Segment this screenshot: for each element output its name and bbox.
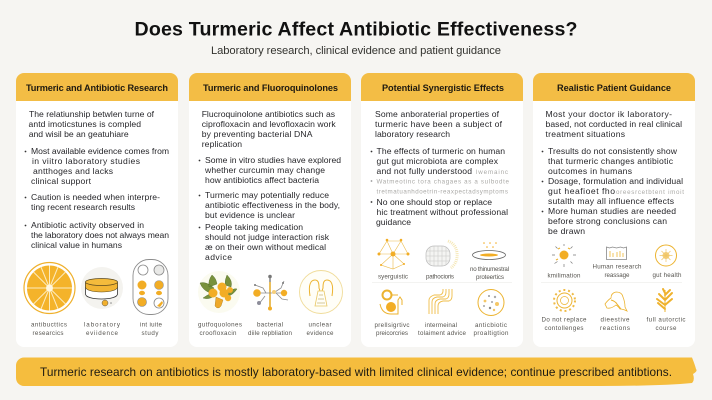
text block: fluoroquinolone notes: whether curcumin may change <box>204 165 325 175</box>
icon labels: croofloxacin <box>200 330 237 337</box>
title: Does Turmeric Affect Antibiotic Effectiveness? <box>134 18 578 40</box>
icon labels row two: Do not replace <box>542 316 587 324</box>
icon: antibiotic culture dish <box>478 290 504 316</box>
icon: prebiotic prescription <box>380 290 402 314</box>
icon labels row two: tolaiment advice <box>418 330 467 337</box>
icon labels row one: reassage <box>604 272 630 279</box>
icon: do not replace <box>554 290 575 311</box>
text block: research notes <box>25 109 169 250</box>
text block: fluoroquinolone notes: Turmeric may potentially reduce <box>205 190 329 200</box>
icon labels row two: course <box>656 325 677 332</box>
icon: intestinal tract <box>429 289 452 314</box>
icon labels: laboratory <box>84 322 121 328</box>
text block: research notes: the laboratory does not always mean <box>31 230 169 240</box>
panel header <box>361 73 523 101</box>
text block: fluoroquinolone notes: Flucroquinolone antibiotics such as <box>202 109 335 119</box>
text block: guidance notes: outcomes in humans <box>548 166 632 176</box>
icon: pathogen mesh <box>426 241 457 268</box>
text block: guidance notes: before strong conclusions can <box>548 216 667 226</box>
icon: bacterial DNA replication <box>253 275 288 310</box>
panel header: Potential Synergistic Effects <box>382 83 504 93</box>
icon labels row one <box>548 264 682 280</box>
panel: potential synergistic effects <box>361 73 523 347</box>
panel header: Realistic Patient Guidance <box>557 83 671 93</box>
text block: guidance notes: based, not corducted in real clinical <box>546 119 682 129</box>
text block: synergy notes <box>371 109 510 227</box>
icon: turmeric slice <box>24 262 75 314</box>
text block: synergy notes: Some anboraterial properties of <box>375 109 500 119</box>
icon labels: diile repbliation <box>248 330 293 337</box>
icon labels: study <box>142 330 159 337</box>
text block: research notes: Most available evidence comes from <box>31 146 169 156</box>
icon: in vitro well plate <box>133 260 168 314</box>
text block: guidance notes: Tresults do not consistently show <box>548 146 678 156</box>
text block: guidance notes: oreesrcetbtent imoit <box>616 189 684 196</box>
callout banner: Turmeric research on antibiotics is mostly laboratory-based with limited clinical evidence; continue prescribed antibtions. <box>40 365 672 379</box>
icon labels row one: pathocioris <box>426 274 454 280</box>
icon labels row one: Human research <box>592 264 642 270</box>
icon labels row two: preicorcries <box>376 330 408 337</box>
text block: research notes: ting recent research results <box>31 202 135 212</box>
icon labels: eviidence <box>86 330 119 337</box>
text block: research notes: Caution is needed when interpre- <box>31 192 160 202</box>
icon labels row two: dieestive <box>600 316 630 324</box>
icon labels: antibucttics <box>31 322 67 328</box>
text block: guidance notes: be drawn <box>548 226 585 236</box>
panel header <box>533 73 695 101</box>
icon labels row one <box>378 266 509 281</box>
icon: digestive reactions <box>605 292 627 311</box>
icon labels: gutfoquolones <box>198 322 242 328</box>
text block: synergy notes: tretmatuanhdoetrin-reaxpectadsymptoms <box>376 188 508 196</box>
icon: inflammation sun <box>552 244 576 267</box>
text block: guidance notes: gut heafioet fho <box>548 186 615 196</box>
text block: synergy notes: and not fully understood <box>376 166 472 176</box>
icon labels row two: proaltigtion <box>474 330 509 337</box>
icon labels row two: contollenges <box>544 325 584 332</box>
text block: guidance notes: Dosage, formulation and individual <box>548 176 683 186</box>
text block: fluoroquinolone notes: Some in vitro studies have explored <box>205 155 341 165</box>
icon labels: evidence <box>306 330 334 337</box>
icon labels row two: anticbiotic <box>475 322 507 329</box>
subtitle: Laboratory research, clinical evidence and patient guidance <box>211 45 501 57</box>
text block: fluoroquinolone notes: People taking medication <box>205 222 303 232</box>
icon labels row one: gut health <box>652 272 682 279</box>
callout banner <box>16 358 697 386</box>
icon: laboratory dish <box>81 267 123 309</box>
panel header <box>189 73 351 101</box>
text block: fluoroquinolone notes: ciprofloxacin and levofloxacin work <box>202 119 336 129</box>
text block: synergy notes: No one should stop or replace <box>376 197 492 207</box>
icon labels row two: reactions <box>600 325 630 332</box>
text block: research notes: clinical value in humans <box>31 240 122 250</box>
icon labels <box>31 322 163 337</box>
text block: research notes: clinical support <box>31 176 92 186</box>
panel header: Turmeric and Fluoroquinolones <box>203 83 338 93</box>
icon: human research message <box>606 247 626 260</box>
panel header: Turmeric and Antibiotic Research <box>26 83 168 93</box>
text block: guidance notes: treatment situations <box>546 129 625 139</box>
text block: synergy notes: The effects of turmeric on human <box>376 146 505 156</box>
icon labels row one: no thinumestral <box>470 266 509 273</box>
panel: turmeric and antibiotic research <box>16 73 178 347</box>
text block: fluoroquinolone notes: replication <box>202 139 242 149</box>
text block: fluoroquinolone notes: should not judge interaction risk <box>205 232 330 242</box>
text block: guidance notes <box>542 109 684 236</box>
icon: gut health <box>656 245 676 266</box>
icon labels row one: syerguistic <box>378 274 408 280</box>
text block: fluoroquinolone notes <box>199 109 341 262</box>
icon labels row one: proteertics <box>476 274 504 281</box>
text block: research notes: in viitro laboratory studies <box>32 156 140 166</box>
icon labels <box>198 322 334 337</box>
text block: synergy notes: gut gut microbiota are complex <box>376 156 499 166</box>
icon: turmeric root and leaves <box>198 271 240 313</box>
text block: research notes: antd imoticstunes is compled <box>28 119 141 129</box>
text block: fluoroquinolone notes: but evidence is unclear <box>205 210 295 220</box>
text block: fluoroquinolone notes: æ on their own without medical <box>205 242 326 252</box>
icon labels row two <box>374 322 509 337</box>
text block: synergy notes: Watmeotinc tora chagaes as a sulbodte <box>376 178 510 186</box>
text block: research notes: antthoges and lacks <box>33 166 113 176</box>
icon labels row one: kmilimation <box>548 272 581 280</box>
panel: realistic patient guidance <box>533 73 695 347</box>
text block: guidance notes: Most your doctor ik laboratory- <box>546 109 672 119</box>
icon labels: researcics <box>32 330 64 337</box>
text block: research notes: The relatiunship betwlen turne of <box>29 109 155 119</box>
icon labels: bacterial <box>257 322 283 328</box>
panel header <box>16 73 178 101</box>
text block: fluoroquinolone notes: advice <box>205 252 232 262</box>
panel: turmeric and fluoroquinolones <box>189 73 351 347</box>
text block: guidance notes: that turmeric changes antibiotic <box>548 156 674 166</box>
icon: full antibiotic course plant <box>657 289 672 312</box>
text block: guidance notes: sutalth may all influence effects <box>548 196 674 206</box>
text block: research notes: and wisil be an geatuhiare <box>29 129 129 139</box>
icon labels row two: full autorctic <box>646 316 686 324</box>
text block: fluoroquinolone notes: by preventing bacterial DNA <box>202 129 313 139</box>
text block: fluoroquinolone notes: how antibiotics affect bacteria <box>205 175 319 185</box>
icon labels row two <box>542 316 686 332</box>
text block: synergy notes: hic treatment without professional <box>376 207 508 217</box>
icon labels row two: intermeinal <box>425 322 457 329</box>
text block: research notes: Antibiotic activity observed in <box>31 220 144 230</box>
icon: unclear evidence <box>300 270 342 314</box>
text block: synergy notes: laboratory research <box>375 129 450 139</box>
text block: synergy notes: lwemainc <box>476 169 508 176</box>
icon labels: unclear <box>308 322 332 328</box>
icon: ellipse protection <box>472 242 506 260</box>
text block: synergy notes: guidance <box>376 217 411 227</box>
text block: fluoroquinolone notes: antibiotic effectiveness in the body, <box>205 200 340 210</box>
icon: synergistic network <box>378 239 410 269</box>
icon labels row two: prellsigrtivc <box>374 322 410 329</box>
text block: guidance notes: More human studies are needed <box>548 206 676 216</box>
text block: synergy notes: turmeric have been a subject of <box>375 119 503 129</box>
icon labels: int iuite <box>140 322 163 328</box>
